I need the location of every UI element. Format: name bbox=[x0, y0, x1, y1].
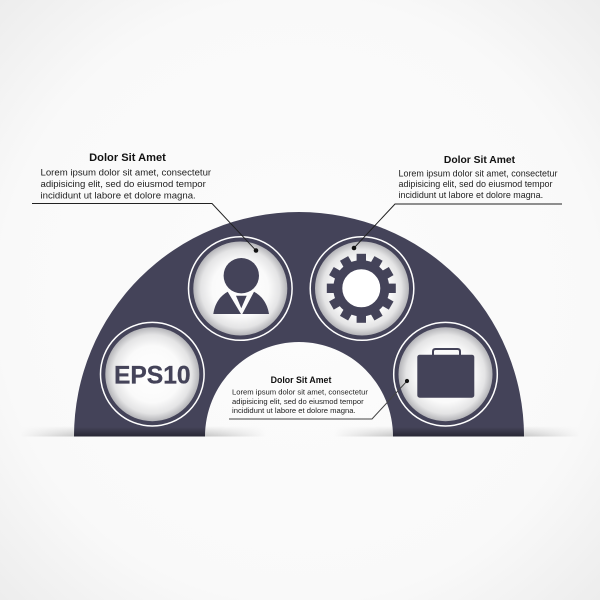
callout line: briefcase bbox=[229, 379, 409, 419]
ground shadow bbox=[30, 428, 570, 436]
heading: centre: Dolor Sit Amet bbox=[271, 375, 331, 385]
text block: top left: adipisicing elit, sed do eiusmod tempor bbox=[40, 179, 207, 190]
text block: top right: Lorem ipsum dolor sit amet, consectetur bbox=[398, 168, 557, 178]
text block: top right bbox=[398, 168, 557, 200]
text block: top left bbox=[40, 168, 212, 202]
text block: top left: incididunt ut labore et dolore magna. bbox=[40, 190, 196, 202]
circle: briefcase bbox=[394, 322, 497, 426]
EPS10 label: EPS10 bbox=[114, 362, 191, 390]
icon: person bbox=[213, 258, 269, 314]
text block: top left: Lorem ipsum dolor sit amet, consectetur bbox=[40, 168, 212, 178]
circle: EPS10 bbox=[100, 322, 204, 426]
icon: briefcase bbox=[417, 349, 474, 398]
text block: centre: incididunt ut labore et dolore magna. bbox=[232, 406, 356, 415]
callout line: gear bbox=[352, 204, 562, 250]
semicircular arch band bbox=[74, 212, 524, 436]
circle: gear bbox=[310, 237, 414, 340]
arch base shadow bbox=[74, 427, 524, 436]
callout line: person bbox=[32, 204, 258, 253]
heading: top left: Dolor Sit Amet bbox=[89, 152, 166, 164]
text block: centre: adipisicing elit, sed do eiusmod tempor bbox=[232, 397, 364, 406]
text block: centre: Lorem ipsum dolor sit amet, consectetur bbox=[232, 388, 368, 396]
circle: person bbox=[188, 237, 292, 340]
text block: top right: incididunt ut labore et dolore magna. bbox=[398, 190, 543, 200]
text block: top right: adipisicing elit, sed do eiusmod tempor bbox=[398, 179, 553, 189]
icon: gear bbox=[327, 254, 396, 323]
text block: centre bbox=[232, 388, 368, 415]
heading: top right: Dolor Sit Amet bbox=[444, 155, 516, 166]
